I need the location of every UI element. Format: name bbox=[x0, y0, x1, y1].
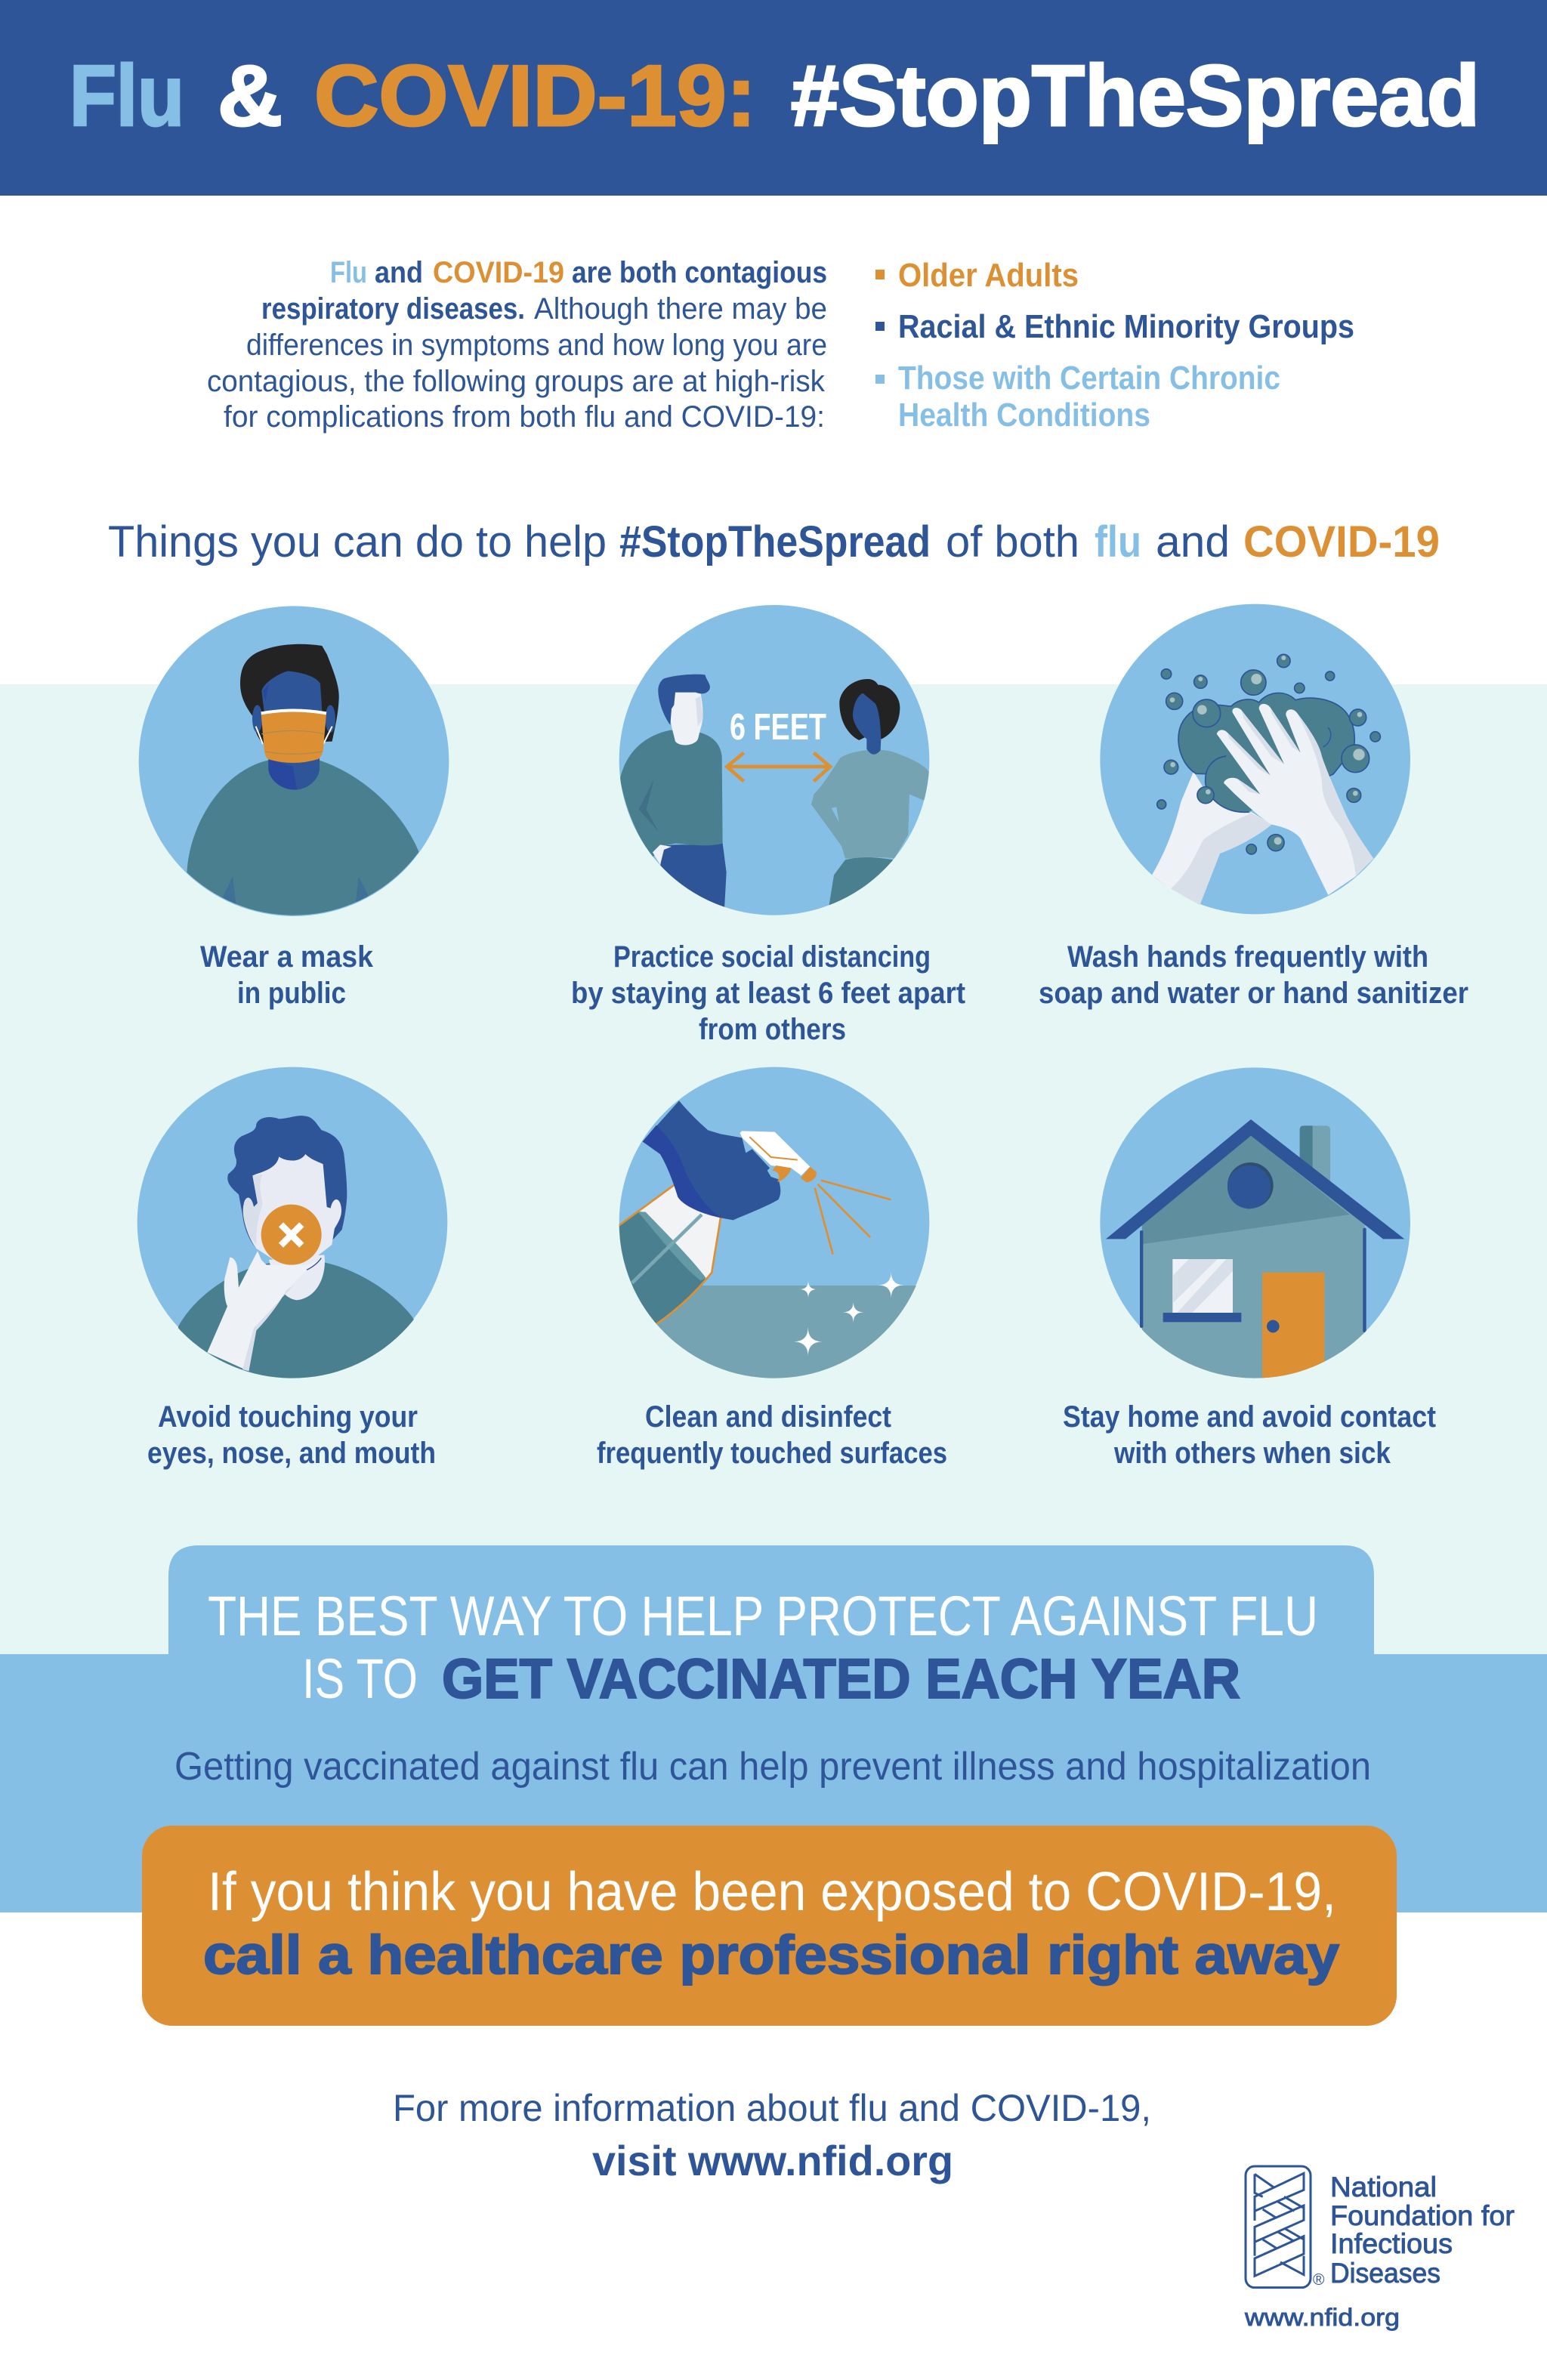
caption: clean and disinfect: frequently touched surfaces bbox=[597, 1437, 947, 1470]
section heading: of both bbox=[946, 517, 1079, 566]
vaccination subtext: Getting vaccinated against flu can help prevent illness and hospitalization bbox=[174, 1745, 1371, 1789]
caption: clean and disinfect: Clean and disinfect bbox=[645, 1400, 891, 1434]
section heading: and bbox=[1156, 517, 1230, 566]
intro paragraph bbox=[207, 256, 827, 434]
vaccination headline: IS TO bbox=[302, 1647, 418, 1710]
intro paragraph: Flu bbox=[330, 256, 367, 289]
title: COVID-19: bbox=[314, 48, 756, 144]
caption: stay home bbox=[1063, 1400, 1436, 1470]
foundation name: Diseases bbox=[1330, 2258, 1440, 2289]
title: & bbox=[218, 48, 283, 144]
registered mark: ® bbox=[1313, 2271, 1325, 2289]
icon: avoid touching face bbox=[137, 1067, 447, 1391]
foundation name: Foundation for bbox=[1330, 2200, 1515, 2231]
exposure message bbox=[203, 1862, 1339, 1986]
foundation name: National bbox=[1330, 2172, 1437, 2203]
caption: social distancing: from others bbox=[699, 1013, 846, 1046]
vaccination headline: GET VACCINATED EACH YEAR bbox=[442, 1647, 1240, 1710]
caption: avoid touching: Avoid touching your bbox=[158, 1400, 418, 1434]
intro paragraph: for complications from both flu and COVID-19: bbox=[224, 400, 825, 434]
section heading bbox=[108, 517, 1440, 566]
website: www.nfid.org bbox=[1244, 2304, 1400, 2331]
pale background band bbox=[0, 684, 1547, 1654]
caption: wash hands: Wash hands frequently with bbox=[1067, 940, 1428, 974]
caption: social distancing: Practice social distancing bbox=[613, 940, 931, 974]
intro paragraph: contagious, the following groups are at high-risk bbox=[207, 365, 826, 398]
foundation name: Infectious bbox=[1330, 2228, 1453, 2259]
caption: avoid touching bbox=[147, 1400, 436, 1470]
caption: wear a mask bbox=[200, 940, 374, 1010]
high-risk groups list: Racial & Ethnic Minority Groups bbox=[898, 308, 1354, 345]
intro paragraph: Although there may be bbox=[534, 292, 827, 326]
intro paragraph: respiratory diseases. bbox=[261, 292, 525, 326]
section heading: COVID-19 bbox=[1243, 517, 1440, 566]
high-risk groups list: Older Adults bbox=[898, 257, 1079, 294]
more information: For more information about flu and COVID-19, bbox=[393, 2087, 1151, 2129]
high-risk groups list bbox=[875, 257, 1354, 434]
intro paragraph: are both contagious bbox=[572, 256, 827, 289]
high-risk groups list: Those with Certain Chronic bbox=[898, 360, 1280, 397]
intro paragraph: and bbox=[375, 256, 423, 289]
caption: avoid touching: eyes, nose, and mouth bbox=[147, 1437, 436, 1470]
caption: wash hands bbox=[1039, 940, 1468, 1010]
more information: visit www.nfid.org bbox=[592, 2137, 953, 2184]
light blue vaccination band bbox=[0, 1654, 1547, 1912]
icon: spray bottle cleaning surface bbox=[615, 1067, 932, 1386]
exposure message: If you think you have been exposed to COVID-19, bbox=[208, 1862, 1336, 1922]
high-risk groups list: Health Conditions bbox=[898, 397, 1150, 434]
title bbox=[69, 48, 1480, 144]
icon: washing hands with soap bbox=[1100, 604, 1410, 914]
intro paragraph: COVID-19 bbox=[433, 256, 564, 289]
section heading: Things you can do to help bbox=[108, 517, 607, 566]
caption: wear a mask: Wear a mask bbox=[200, 940, 374, 974]
icon: house bbox=[1100, 1067, 1410, 1391]
vaccination callout tab bbox=[168, 1545, 1374, 1710]
title: Flu bbox=[69, 48, 184, 144]
caption: social distancing: by staying at least 6 feet apart bbox=[571, 977, 965, 1010]
icon: DNA helix bbox=[1246, 2166, 1311, 2288]
section heading: #StopTheSpread bbox=[619, 517, 931, 566]
icon: two people six feet apart bbox=[619, 605, 930, 915]
header banner bbox=[0, 0, 1547, 196]
more information bbox=[393, 2087, 1151, 2184]
caption: stay home: with others when sick bbox=[1113, 1437, 1391, 1470]
COVID-19 exposure callout bbox=[142, 1826, 1397, 2026]
NFID logo bbox=[1244, 2166, 1515, 2331]
section heading: flu bbox=[1095, 517, 1141, 566]
icon: person wearing a mask bbox=[139, 606, 449, 928]
foundation name bbox=[1330, 2172, 1515, 2289]
caption: wear a mask: in public bbox=[237, 977, 346, 1010]
intro paragraph: differences in symptoms and how long you are bbox=[246, 329, 827, 362]
caption: wash hands: soap and water or hand sanitizer bbox=[1039, 977, 1468, 1010]
caption: social distancing bbox=[571, 940, 965, 1046]
title: #StopTheSpread bbox=[791, 48, 1480, 144]
exposure message: call a healthcare professional right away bbox=[203, 1925, 1339, 1986]
caption: stay home: Stay home and avoid contact bbox=[1063, 1400, 1436, 1434]
vaccination headline bbox=[208, 1585, 1318, 1710]
caption: clean and disinfect bbox=[597, 1400, 947, 1470]
vaccination headline: THE BEST WAY TO HELP PROTECT AGAINST FLU bbox=[208, 1585, 1318, 1647]
label: 6 feet: 6 FEET bbox=[730, 707, 826, 748]
